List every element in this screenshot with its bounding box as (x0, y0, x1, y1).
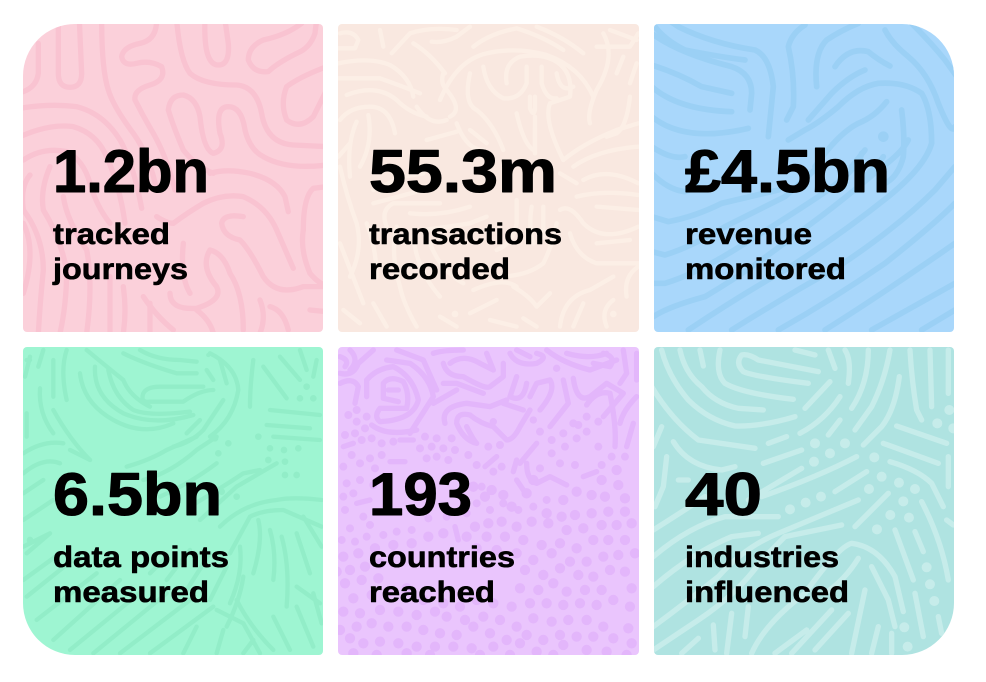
number: 193 (369, 461, 472, 528)
panel: tracked journeys (20, 20, 327, 333)
pattern: teal labyrinth (652, 350, 953, 653)
panel background: teal (654, 347, 954, 655)
label: measured (53, 576, 209, 609)
label: recorded (369, 253, 510, 286)
pattern: green labyrinth (23, 350, 322, 653)
pattern: peach labyrinth (338, 27, 638, 327)
panel background: purple (338, 347, 639, 655)
label: transactions (369, 218, 562, 251)
label: revenue (685, 218, 812, 251)
panel background: pink (23, 24, 323, 332)
label: data points (53, 541, 229, 574)
label: monitored (685, 253, 846, 286)
panel background: blue (654, 24, 954, 332)
panel: industries influenced (652, 347, 954, 655)
pattern: purple labyrinth and dots (337, 350, 637, 655)
panel background: green (23, 347, 323, 655)
number: £4.5bn (685, 138, 890, 205)
pattern: pink labyrinth (20, 20, 327, 333)
label: influenced (685, 576, 849, 609)
number: 55.3m (369, 138, 557, 205)
panel background: peach (338, 24, 639, 332)
label: tracked (53, 218, 170, 251)
panel: data points measured (23, 347, 323, 655)
label: industries (685, 541, 839, 574)
number: 6.5bn (53, 461, 222, 528)
label: journeys (52, 253, 188, 286)
panel: countries reached (337, 347, 639, 655)
panel: revenue monitored (652, 20, 962, 332)
number: 40 (685, 461, 762, 528)
panel: transactions recorded (338, 24, 639, 332)
label: countries (369, 541, 515, 574)
number: 1.2bn (53, 138, 209, 205)
label: reached (369, 576, 495, 609)
pattern: blue labyrinth (652, 20, 962, 330)
